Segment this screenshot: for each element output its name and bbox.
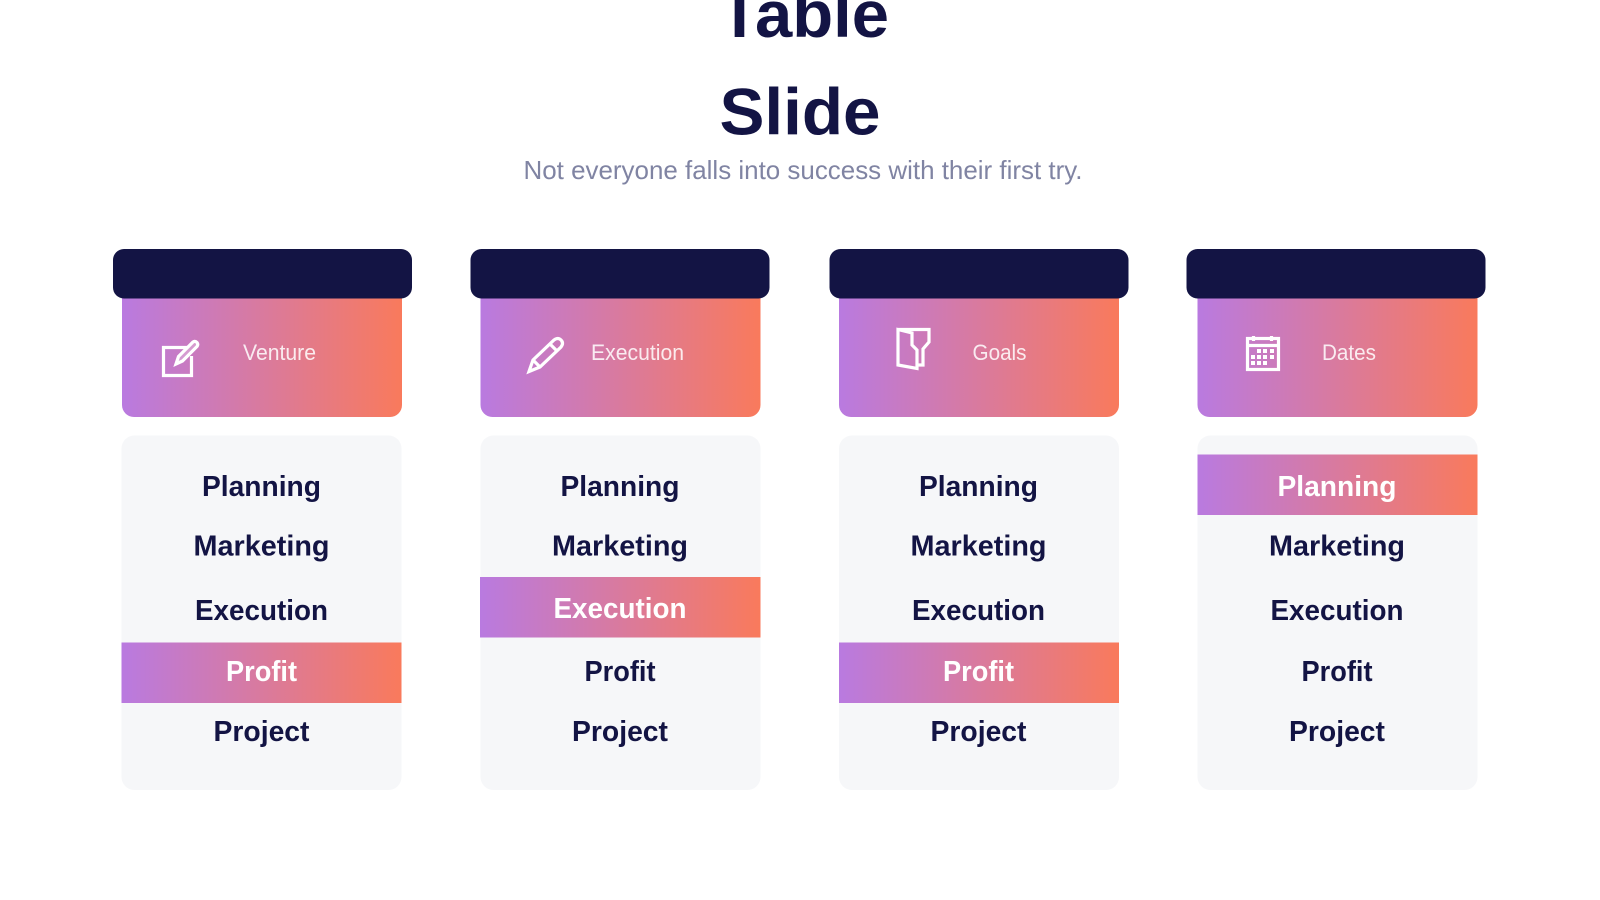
list panel: Execution <box>554 593 686 625</box>
list panel: Execution <box>1270 595 1404 627</box>
header label: Dates <box>1322 340 1376 365</box>
subtitle: Not everyone falls into success with their first try. <box>524 155 1082 185</box>
list panel: Planning <box>560 471 680 503</box>
list panel: Marketing <box>1269 530 1405 562</box>
list panel: Profit <box>943 656 1014 688</box>
list panel <box>480 436 760 790</box>
list panel: Profit <box>584 656 656 688</box>
column: Execution <box>470 249 770 790</box>
list panel: Project <box>1289 716 1385 748</box>
title: Slide <box>720 74 880 148</box>
header card <box>470 249 770 417</box>
column: Venture <box>113 249 412 790</box>
list panel: Planning <box>202 471 321 503</box>
header card <box>830 249 1128 417</box>
list panel: Marketing <box>552 530 688 562</box>
column: Goals <box>830 249 1128 790</box>
list panel: Marketing <box>194 530 330 562</box>
title <box>719 0 889 148</box>
header card <box>113 249 412 417</box>
header label: Execution <box>591 340 684 365</box>
header label: Venture <box>243 340 316 365</box>
list panel: Profit <box>226 656 297 688</box>
icon: calendar <box>1248 336 1278 370</box>
header card <box>1186 249 1486 417</box>
list panel: Execution <box>195 595 328 627</box>
header label: Goals <box>972 340 1026 365</box>
list panel: Execution <box>912 595 1045 627</box>
list panel: Project <box>214 716 310 748</box>
list panel: Planning <box>1278 471 1396 503</box>
icon: edit <box>164 341 198 376</box>
list panel: Marketing <box>910 530 1046 562</box>
list panel <box>122 436 402 790</box>
list panel: Project <box>930 716 1027 748</box>
list panel <box>1198 436 1478 790</box>
list panel: Profit <box>1302 656 1373 688</box>
list panel: Project <box>572 716 668 748</box>
list panel: Planning <box>919 471 1038 503</box>
icon: pencil <box>529 338 562 372</box>
list panel <box>839 436 1119 790</box>
column: Dates <box>1186 249 1486 790</box>
icon: door <box>898 330 929 368</box>
